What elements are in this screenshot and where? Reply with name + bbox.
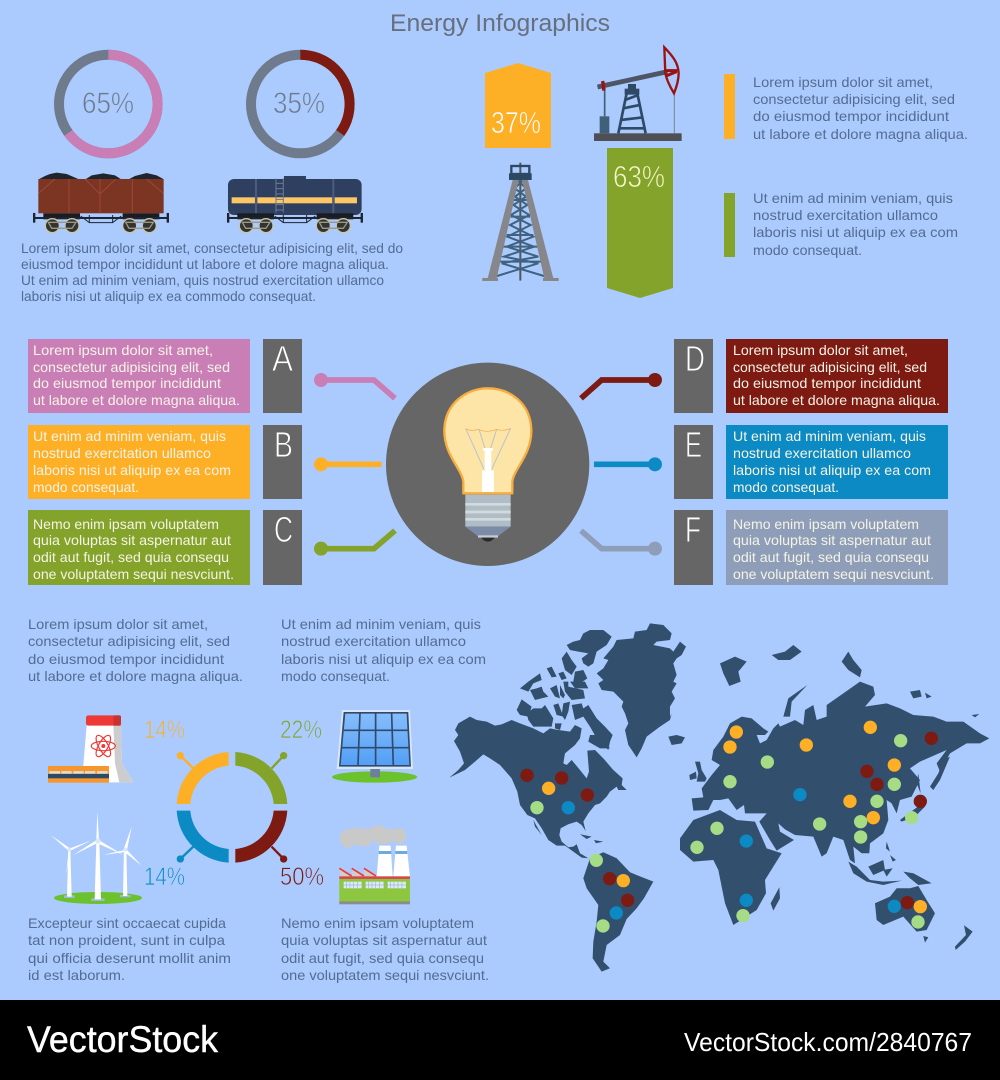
text block: lower left 2 <box>281 616 486 684</box>
Americas <box>449 717 653 972</box>
panel: A text <box>28 339 250 413</box>
world map <box>449 623 989 972</box>
panel: E text <box>726 425 948 499</box>
segmented donut chart <box>177 752 287 863</box>
icon: wind turbines <box>51 812 142 904</box>
donut chart: 65%: 65% <box>82 87 134 120</box>
panel: A text: ut labore et dolore magna aliqua. <box>33 392 240 408</box>
text block: wagons: Ut enim ad minim veniam, quis nostrud exercitation ullamco <box>21 272 384 288</box>
letter tile: F <box>674 509 713 585</box>
letter tile: C: C <box>274 509 293 550</box>
panel: E text: nostrud exercitation ullamco <box>733 445 911 461</box>
text block: legend orange: consectetur adipisicing elit, sed <box>753 91 955 107</box>
panel: D text: consectetur adipisicing elit, sed <box>733 359 927 375</box>
arrow bar: 63% <box>607 148 673 298</box>
text block: lower left 4: quia voluptas sit aspernatur aut <box>281 932 487 948</box>
text block: lower left 3: Excepteur sint occaecat cupida <box>28 915 226 931</box>
letter tile: E: E <box>685 424 702 465</box>
panel: B text: nostrud exercitation ullamco <box>33 445 211 461</box>
text block: lower left 1 <box>28 616 243 684</box>
text block: wagons: laboris nisi ut aliquip ex ea commodo consequat. <box>21 288 316 304</box>
text block: legend green: nostrud exercitation ullamco <box>753 207 938 223</box>
letter tile: F: F <box>685 509 701 550</box>
text block: lower left 3: tat non proident, sunt in culpa <box>28 932 225 948</box>
arrow bar: 37%: 37% <box>491 105 541 140</box>
letter tile: B: B <box>274 424 293 465</box>
text block: legend orange: do eiusmod tempor incididunt <box>753 108 949 124</box>
letter tile: D: D <box>685 338 705 379</box>
panel: F text: Nemo enim ipsam voluptatem <box>733 516 919 532</box>
icon: solar panel <box>332 710 417 783</box>
arrow bar: 37% <box>485 63 551 148</box>
value label: wind 14%: 14% <box>144 863 185 891</box>
icon: tank wagon <box>227 176 363 233</box>
icon: oil derrick <box>482 163 559 281</box>
legend marker: green <box>724 193 735 257</box>
text block: lower left 4: Nemo enim ipsam voluptatem <box>281 915 474 931</box>
text block: lower left 2: laboris nisi ut aliquip ex ea com <box>281 651 486 667</box>
panel: C text: one voluptatem sequi nesvciunt. <box>33 566 234 582</box>
title: Energy Infographics <box>390 10 610 37</box>
Eurasia, Africa and Oceania <box>680 645 989 950</box>
text block: lower left 1: Lorem ipsum dolor sit amet, <box>28 616 208 632</box>
panel: B text: modo consequat. <box>33 479 139 495</box>
letter tile: E <box>674 424 713 499</box>
icon: light bulb in circle <box>386 363 589 566</box>
text block: legend green: Ut enim ad minim veniam, quis <box>753 190 953 206</box>
panel: E text: laboris nisi ut aliquip ex ea com <box>733 462 931 478</box>
value label: solar 22%: 22% <box>280 716 322 744</box>
panel: E text: modo consequat. <box>733 479 839 495</box>
text block: legend green <box>753 190 958 258</box>
value label: factory 50%: 50% <box>280 863 324 891</box>
icon: factory with smoke <box>339 825 410 904</box>
icon: coal wagon <box>33 173 169 233</box>
panel: D text: do eiusmod tempor incididunt <box>733 375 921 391</box>
legend marker: orange <box>724 74 735 139</box>
text block: lower left 1: ut labore et dolore magna aliqua. <box>28 668 243 684</box>
text block: lower left 4: odit aut fugit, sed quia consequ <box>281 950 484 966</box>
footer bar <box>0 1000 1000 1080</box>
text block: wagons <box>21 240 403 304</box>
panel: C text: odit aut fugit, sed quia consequ <box>33 549 229 565</box>
text block: lower left 3: qui officia deserunt mollit anim <box>28 950 231 966</box>
footer bar: VectorStock <box>27 1019 218 1060</box>
text block: lower left 2: modo consequat. <box>281 668 390 684</box>
panel: B text: laboris nisi ut aliquip ex ea com <box>33 462 231 478</box>
text block: legend orange <box>753 74 968 142</box>
text block: lower left 1: consectetur adipisicing elit, sed <box>28 633 230 649</box>
text block: lower left 2: Ut enim ad minim veniam, quis <box>281 616 481 632</box>
panel: C text: Nemo enim ipsam voluptatem <box>33 516 219 532</box>
value label: nuclear 14%: 14% <box>144 716 185 744</box>
icon: nuclear plant <box>48 715 133 783</box>
letter tile: C <box>263 509 302 585</box>
text block: lower left 4: one voluptatem sequi nesvciunt. <box>281 967 489 983</box>
letter tile: A: A <box>272 338 293 379</box>
panel: E text: Ut enim ad minim veniam, quis <box>733 428 926 444</box>
donut chart: 35% <box>251 55 350 153</box>
text block: lower left 1: do eiusmod tempor incididunt <box>28 651 224 667</box>
panel: D text: ut labore et dolore magna aliqua. <box>733 392 940 408</box>
panel: F text: odit aut fugit, sed quia consequ <box>733 549 929 565</box>
text block: legend orange: Lorem ipsum dolor sit amet, <box>753 74 933 90</box>
donut chart: 65% <box>59 55 158 153</box>
icon: pump jack <box>594 47 682 141</box>
map markers <box>520 721 938 933</box>
panel: A text: consectetur adipisicing elit, sed <box>33 359 230 375</box>
panel: B text: Ut enim ad minim veniam, quis <box>33 428 226 444</box>
letter tile: B <box>263 424 302 499</box>
panel: B text <box>28 425 250 499</box>
panel: C text <box>28 510 250 585</box>
connectors to bulb <box>314 373 662 556</box>
text block: legend green: laboris nisi ut aliquip ex ea com <box>753 224 958 240</box>
panel: F text: one voluptatem sequi nesvciunt. <box>733 566 934 582</box>
text block: lower left 2: nostrud exercitation ullamco <box>281 633 466 649</box>
arrow bar: 63%: 63% <box>613 159 665 194</box>
panel: A text: do eiusmod tempor incididunt <box>33 375 221 391</box>
footer bar: VectorStock.com/2840767 <box>684 1027 972 1057</box>
donut chart: 35%: 35% <box>273 87 325 120</box>
text block: legend green: modo consequat. <box>753 242 862 258</box>
panel: D text: Lorem ipsum dolor sit amet, <box>733 342 908 358</box>
panel: A text: Lorem ipsum dolor sit amet, <box>33 342 213 358</box>
text block: legend orange: ut labore et dolore magna aliqua. <box>753 126 968 142</box>
text block: wagons: Lorem ipsum dolor sit amet, consectetur adipisicing elit, sed do <box>21 240 403 256</box>
text block: wagons: eiusmod tempor incididunt ut labore et dolore magna aliqua. <box>21 256 389 272</box>
letter tile: D <box>674 338 713 413</box>
panel: D text <box>726 339 948 413</box>
text block: lower left 3 <box>28 915 231 983</box>
Arctic Canada, Greenland and Iceland <box>517 623 686 757</box>
text block: lower left 3: id est laborum. <box>28 967 125 983</box>
panel: F text: quia voluptas sit aspernatur aut <box>733 532 931 548</box>
panel: F text <box>726 510 948 585</box>
panel: C text: quia voluptas sit aspernatur aut <box>33 532 231 548</box>
text block: lower left 4 <box>281 915 489 983</box>
letter tile: A <box>263 338 302 413</box>
